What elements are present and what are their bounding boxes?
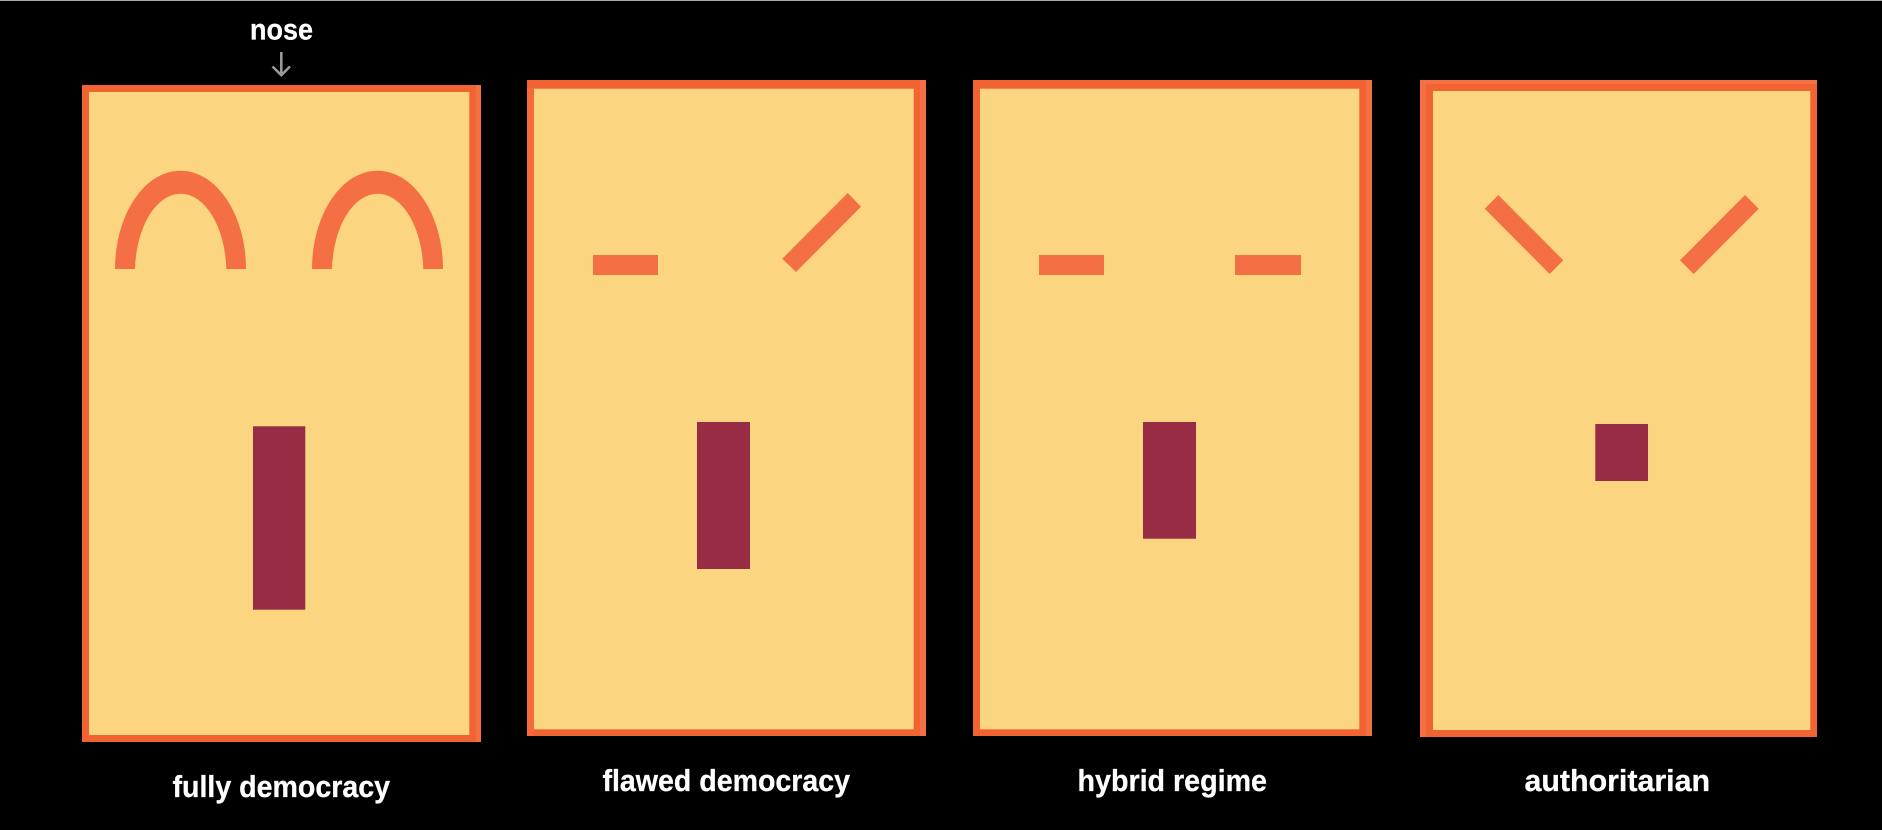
label: hybrid regime: hybrid regime [1078, 763, 1267, 798]
panel: fully democracy [82, 85, 481, 742]
mouth: small square [1595, 424, 1648, 481]
panel: authoritarian [1420, 80, 1817, 737]
panel frame [973, 80, 1372, 736]
left eyebrow: arch [115, 171, 246, 269]
left eyebrow: flat [1039, 255, 1104, 275]
mouth: shorter bar [1143, 422, 1196, 539]
right eyebrow: flat [1235, 255, 1301, 275]
mouth: tall bar [253, 426, 305, 610]
panel: hybrid regime [973, 80, 1372, 736]
right eyebrow: arch [312, 171, 443, 269]
label: fully democracy: fully democracy [172, 769, 391, 804]
arrow: points down to the nose [272, 52, 290, 75]
left eyebrow: flat [593, 255, 658, 275]
panel frame [82, 85, 481, 742]
label: flawed democracy: flawed democracy [602, 763, 851, 798]
left eyebrow: angry diagonal [1485, 195, 1563, 274]
right eyebrow: raised diagonal [782, 193, 861, 272]
mouth: medium bar [697, 422, 750, 569]
panel: flawed democracy [527, 80, 926, 736]
panel frame [1420, 80, 1817, 737]
annotation: nose label: nose [250, 14, 313, 46]
right eyebrow: angry diagonal [1680, 195, 1759, 274]
panel frame [527, 80, 926, 736]
label: authoritarian: authoritarian [1524, 763, 1710, 798]
